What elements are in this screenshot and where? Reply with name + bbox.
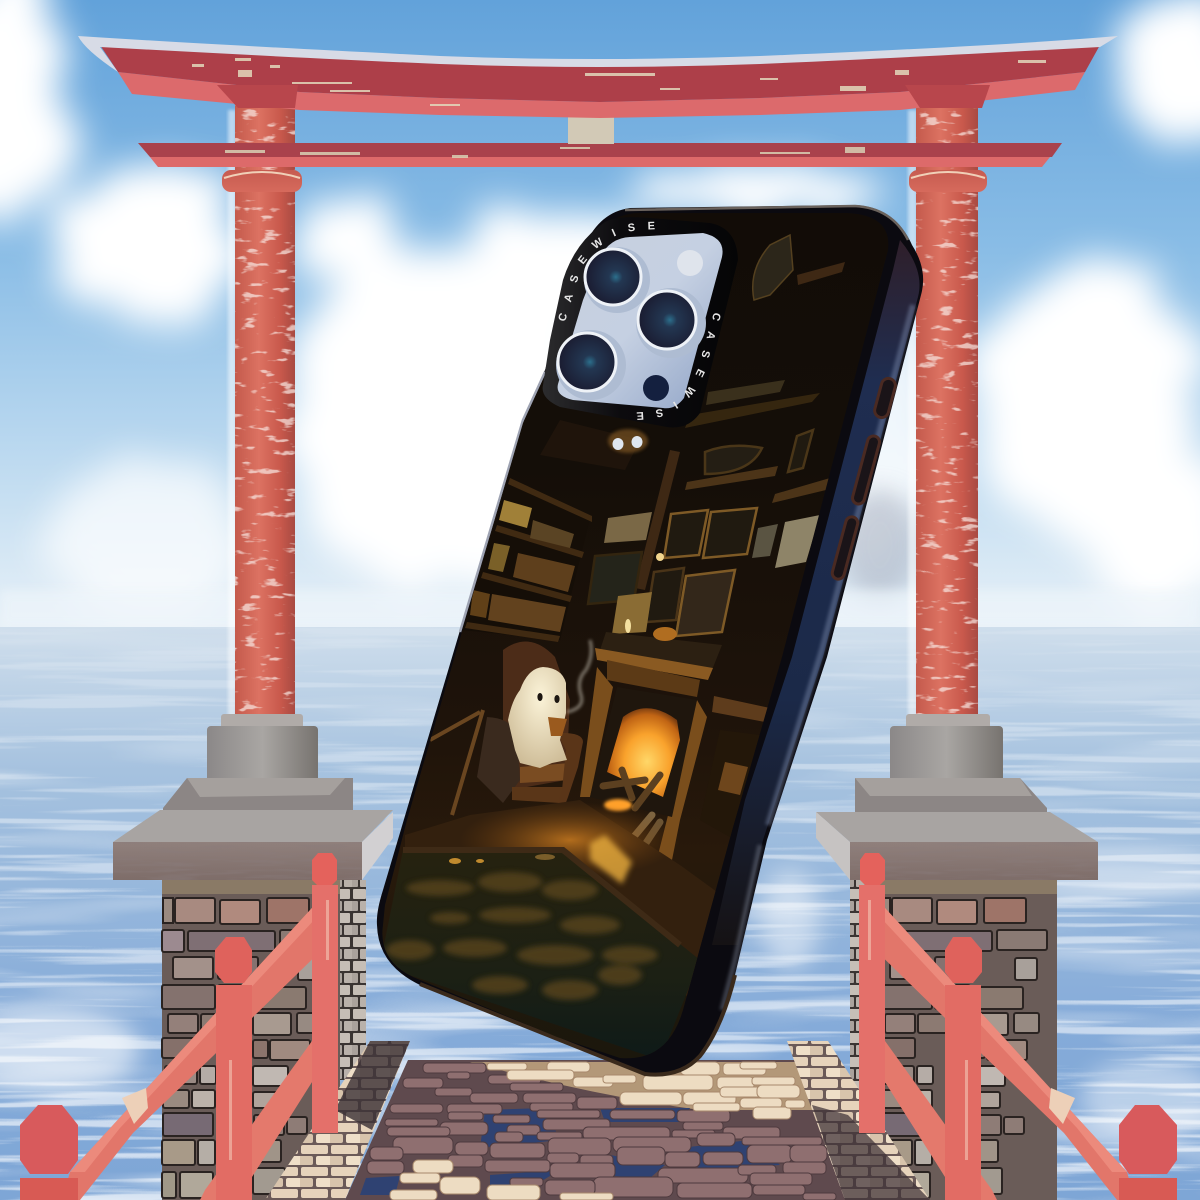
sky background — [0, 0, 1200, 630]
brand text top-left — [565, 229, 672, 322]
shaded cobbles — [367, 1063, 836, 1200]
shelves on right wall — [612, 466, 830, 634]
lens bottom — [556, 330, 626, 400]
left stone base — [113, 714, 393, 1200]
lidar — [643, 375, 669, 401]
clouds — [0, 0, 1200, 620]
logs — [603, 770, 660, 852]
camera island — [558, 233, 723, 408]
torii gate — [78, 36, 1118, 720]
fire reflection — [590, 835, 632, 884]
artwork: haunted library — [370, 200, 900, 1070]
pillar caps — [217, 85, 298, 108]
left pillar — [222, 100, 302, 720]
cloud shadow beside phone — [840, 490, 920, 600]
side chair — [430, 710, 483, 815]
books — [499, 500, 532, 528]
sunlit ground — [470, 1062, 815, 1110]
ceiling and column — [540, 420, 680, 590]
sea swell reflections — [0, 627, 1200, 1200]
horizon haze — [0, 590, 1200, 628]
case body — [377, 205, 923, 1076]
lens top — [584, 247, 650, 313]
upper roof beam — [78, 36, 1118, 118]
sea — [0, 627, 1200, 1200]
navy side reflection — [712, 240, 920, 945]
right edge bricks — [787, 1041, 930, 1200]
camera module — [542, 218, 738, 428]
rug — [380, 850, 700, 1060]
bottom rim warm edge — [420, 975, 735, 1075]
side buttons — [831, 377, 897, 580]
ghost with mug — [508, 640, 591, 768]
puddles — [360, 1108, 780, 1195]
top rim highlight — [625, 206, 908, 240]
left rim highlight — [460, 372, 545, 632]
phone case — [376, 204, 924, 1077]
lower crossbeam — [138, 143, 1062, 167]
shelf boards — [465, 478, 592, 642]
fireplace — [580, 648, 713, 860]
camera module: CASEWISE — [558, 222, 655, 321]
glowing eyes — [608, 429, 648, 453]
mantel ornaments — [600, 553, 722, 670]
camera module: CASEWISE — [636, 313, 720, 420]
steam — [567, 640, 591, 712]
lower side streaks — [722, 845, 760, 1010]
lens right — [636, 288, 706, 358]
side glare — [768, 305, 913, 825]
right pillar — [908, 100, 987, 720]
right railing — [859, 853, 1177, 1200]
wooden floor — [405, 800, 735, 1000]
cloud reflections on sea — [0, 845, 1200, 1140]
sunlit cobbles — [390, 1062, 805, 1200]
left edge bricks — [265, 1041, 410, 1200]
flash — [677, 250, 703, 276]
floor glow — [474, 806, 664, 872]
bookshelves — [462, 478, 652, 642]
right side cabinet — [712, 696, 768, 795]
mug — [548, 717, 567, 736]
armchair — [477, 642, 583, 803]
upper wall details — [685, 235, 845, 428]
camera ring — [543, 217, 738, 427]
stone walkway — [265, 1041, 930, 1200]
shaded ground — [345, 1060, 850, 1200]
picture frames — [588, 430, 813, 636]
brand text bottom-right — [600, 312, 714, 413]
right stone base — [816, 714, 1098, 1200]
centre strut — [568, 104, 614, 144]
left railing — [20, 853, 338, 1200]
